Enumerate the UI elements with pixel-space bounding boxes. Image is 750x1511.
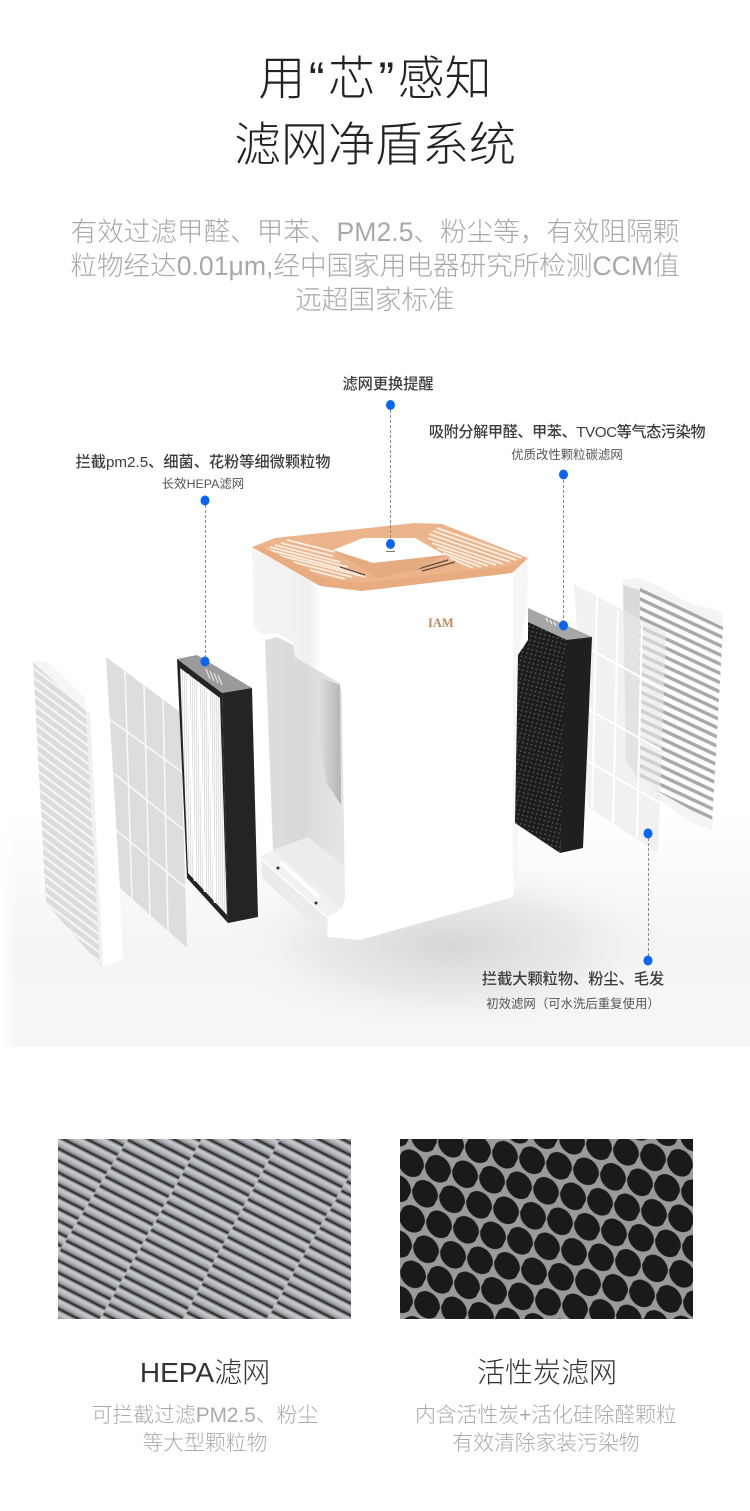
HEPA description [92, 1404, 318, 1455]
purifier silhouette [252, 547, 528, 940]
HEPA description: 等大型颗粒物 [143, 1432, 267, 1455]
title [234, 52, 516, 171]
purifier right strip [513, 558, 528, 897]
callout: pre-filter: 初效滤网（可水洗后重复使用） [486, 997, 660, 1011]
HEPA filter block [177, 655, 258, 923]
right rear grille panel [623, 578, 723, 830]
title: 用“芯”感知 [258, 52, 492, 105]
purifier body [252, 523, 528, 940]
callout: filter replacement reminder: 滤网更换提醒 [342, 376, 434, 393]
activated carbon photo panel [400, 1139, 693, 1319]
lid rim [252, 546, 528, 591]
control panel [333, 538, 445, 563]
carbon description: 内含活性炭+活化硅除醛颗粒 [415, 1404, 677, 1427]
subtitle text block: 粒物经达0.01μm,经中国家用电器研究所检测CCM值 [70, 251, 680, 281]
title: 滤网净盾系统 [234, 118, 516, 171]
callout: HEPA filter [76, 454, 330, 491]
floor background [0, 520, 750, 1047]
subtitle text block: 远超国家标准 [295, 285, 455, 315]
subtitle text block [70, 217, 680, 315]
HEPA photo panel [58, 1139, 351, 1319]
callout: HEPA filter: 拦截pm2.5、细菌、花粉等细微颗粒物 [76, 454, 330, 471]
purifier lid [252, 523, 528, 588]
callout: pre-filter: 拦截大颗粒物、粉尘、毛发 [482, 971, 664, 988]
callout leader lines [206, 410, 648, 960]
right pre-filter mesh [574, 584, 666, 853]
HEPA description: 可拦截过滤PM2.5、粉尘 [92, 1404, 318, 1427]
left front grille panel [33, 660, 123, 966]
callout: carbon filter: 优质改性颗粒碳滤网 [511, 448, 623, 462]
carbon heading: 活性炭滤网 [477, 1357, 617, 1388]
purifier base ledge [260, 850, 342, 917]
callout: HEPA filter: 长效HEPA滤网 [162, 477, 244, 491]
lid vent slats [266, 528, 522, 579]
IAM logo: IAM [428, 616, 454, 630]
purifier left shroud [252, 547, 320, 672]
HEPA heading: HEPA滤网 [140, 1357, 270, 1388]
left pre-filter mesh [106, 657, 187, 948]
callout: pre-filter [482, 970, 664, 1011]
carbon filter block [515, 608, 592, 853]
callout dots [200, 400, 652, 966]
purifier cavity [262, 637, 345, 917]
carbon description: 有效清除家装污染物 [452, 1432, 640, 1455]
callout: carbon filter: 吸附分解甲醛、甲苯、TVOC等气态污染物 [429, 424, 705, 441]
carbon description [415, 1404, 677, 1455]
subtitle text block: 有效过滤甲醛、甲苯、PM2.5、粉尘等，有效阻隔颗 [71, 217, 679, 247]
callout: carbon filter [429, 424, 705, 462]
